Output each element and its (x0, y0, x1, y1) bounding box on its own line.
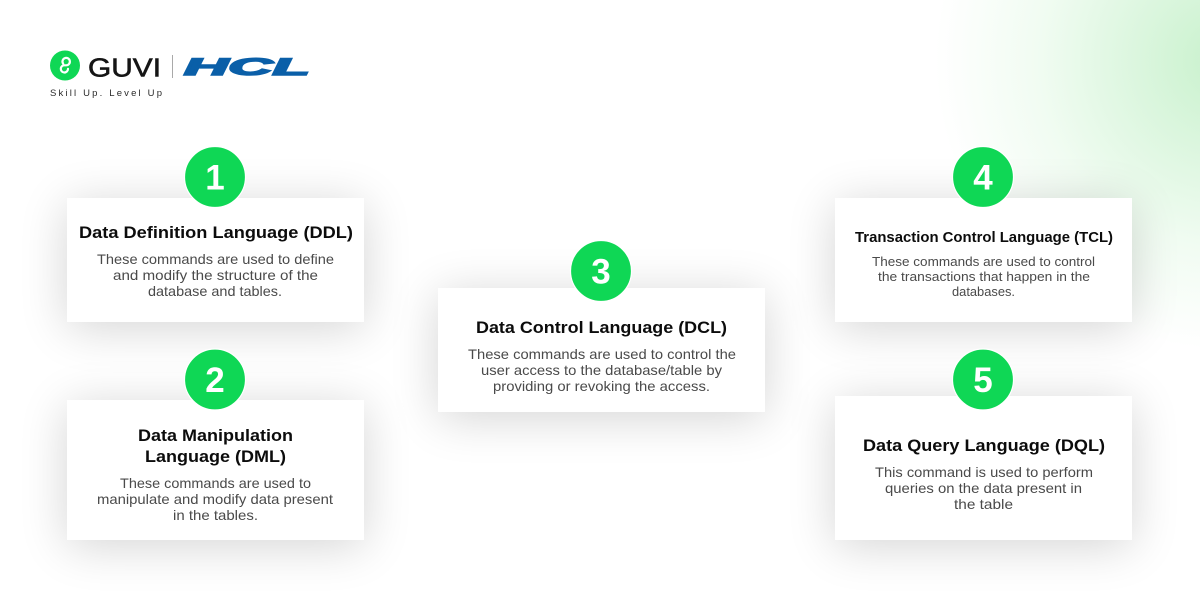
GUVI wordmark: GUVI (88, 52, 161, 82)
description: DQL: queries on the data present in (885, 480, 1082, 496)
panel: DCL (438, 240, 765, 418)
heading: DML: Data Manipulation (138, 426, 293, 445)
number badge 1: 1 (205, 158, 225, 198)
number badge 2: 2 (205, 361, 225, 400)
number badge 1 (184, 146, 246, 208)
heading: DCL: Data Control Language (DCL) (476, 318, 727, 337)
description: DDL: These commands are used to define (97, 251, 334, 267)
heading: DQL: Data Query Language (DQL) (863, 436, 1105, 455)
panel: DDL (67, 146, 364, 328)
number badge 4 (952, 146, 1014, 208)
HCL wordmark: HCL (184, 54, 310, 81)
number badge 5: 5 (973, 361, 993, 400)
heading: TCL: Transaction Control Language (TCL) (855, 230, 1113, 246)
tagline: Skill Up. Level Up (50, 88, 162, 99)
logo: GUVI and HCL (50, 50, 310, 99)
description: DML (97, 475, 333, 523)
description: DCL: These commands are used to control the (468, 346, 736, 362)
icon: GUVI green circle (50, 50, 80, 80)
description: DCL: user access to the database/table by (481, 362, 722, 378)
heading: DDL: Data Definition Language (DDL) (79, 223, 353, 242)
description: DCL (468, 346, 736, 394)
number badge 2 (184, 349, 246, 410)
number badge 4: 4 (973, 158, 993, 198)
description: DCL: providing or revoking the access. (493, 378, 710, 394)
heading: DML: Language (DML) (145, 447, 286, 466)
panel: TCL (835, 146, 1132, 328)
description: DQL: This command is used to perform (875, 464, 1093, 480)
description: TCL: databases. (952, 284, 1015, 299)
description: DDL: database and tables. (148, 283, 282, 299)
description: DDL (97, 251, 334, 299)
number badge 3: 3 (591, 252, 611, 292)
description: DQL (875, 464, 1093, 512)
description: TCL (872, 254, 1095, 299)
description: DQL: the table (954, 496, 1013, 512)
description: DML: in the tables. (173, 507, 258, 523)
panel: DQL (835, 349, 1132, 546)
description: TCL: the transactions that happen in the (878, 269, 1090, 284)
number badge 5 (952, 349, 1014, 410)
heading: DML (138, 426, 293, 466)
panel: DML (67, 349, 364, 546)
description: DML: These commands are used to (120, 475, 311, 491)
description: DML: manipulate and modify data present (97, 491, 333, 507)
description: DDL: and modify the structure of the (113, 267, 318, 283)
description: TCL: These commands are used to control (872, 254, 1095, 269)
number badge 3 (570, 240, 632, 302)
